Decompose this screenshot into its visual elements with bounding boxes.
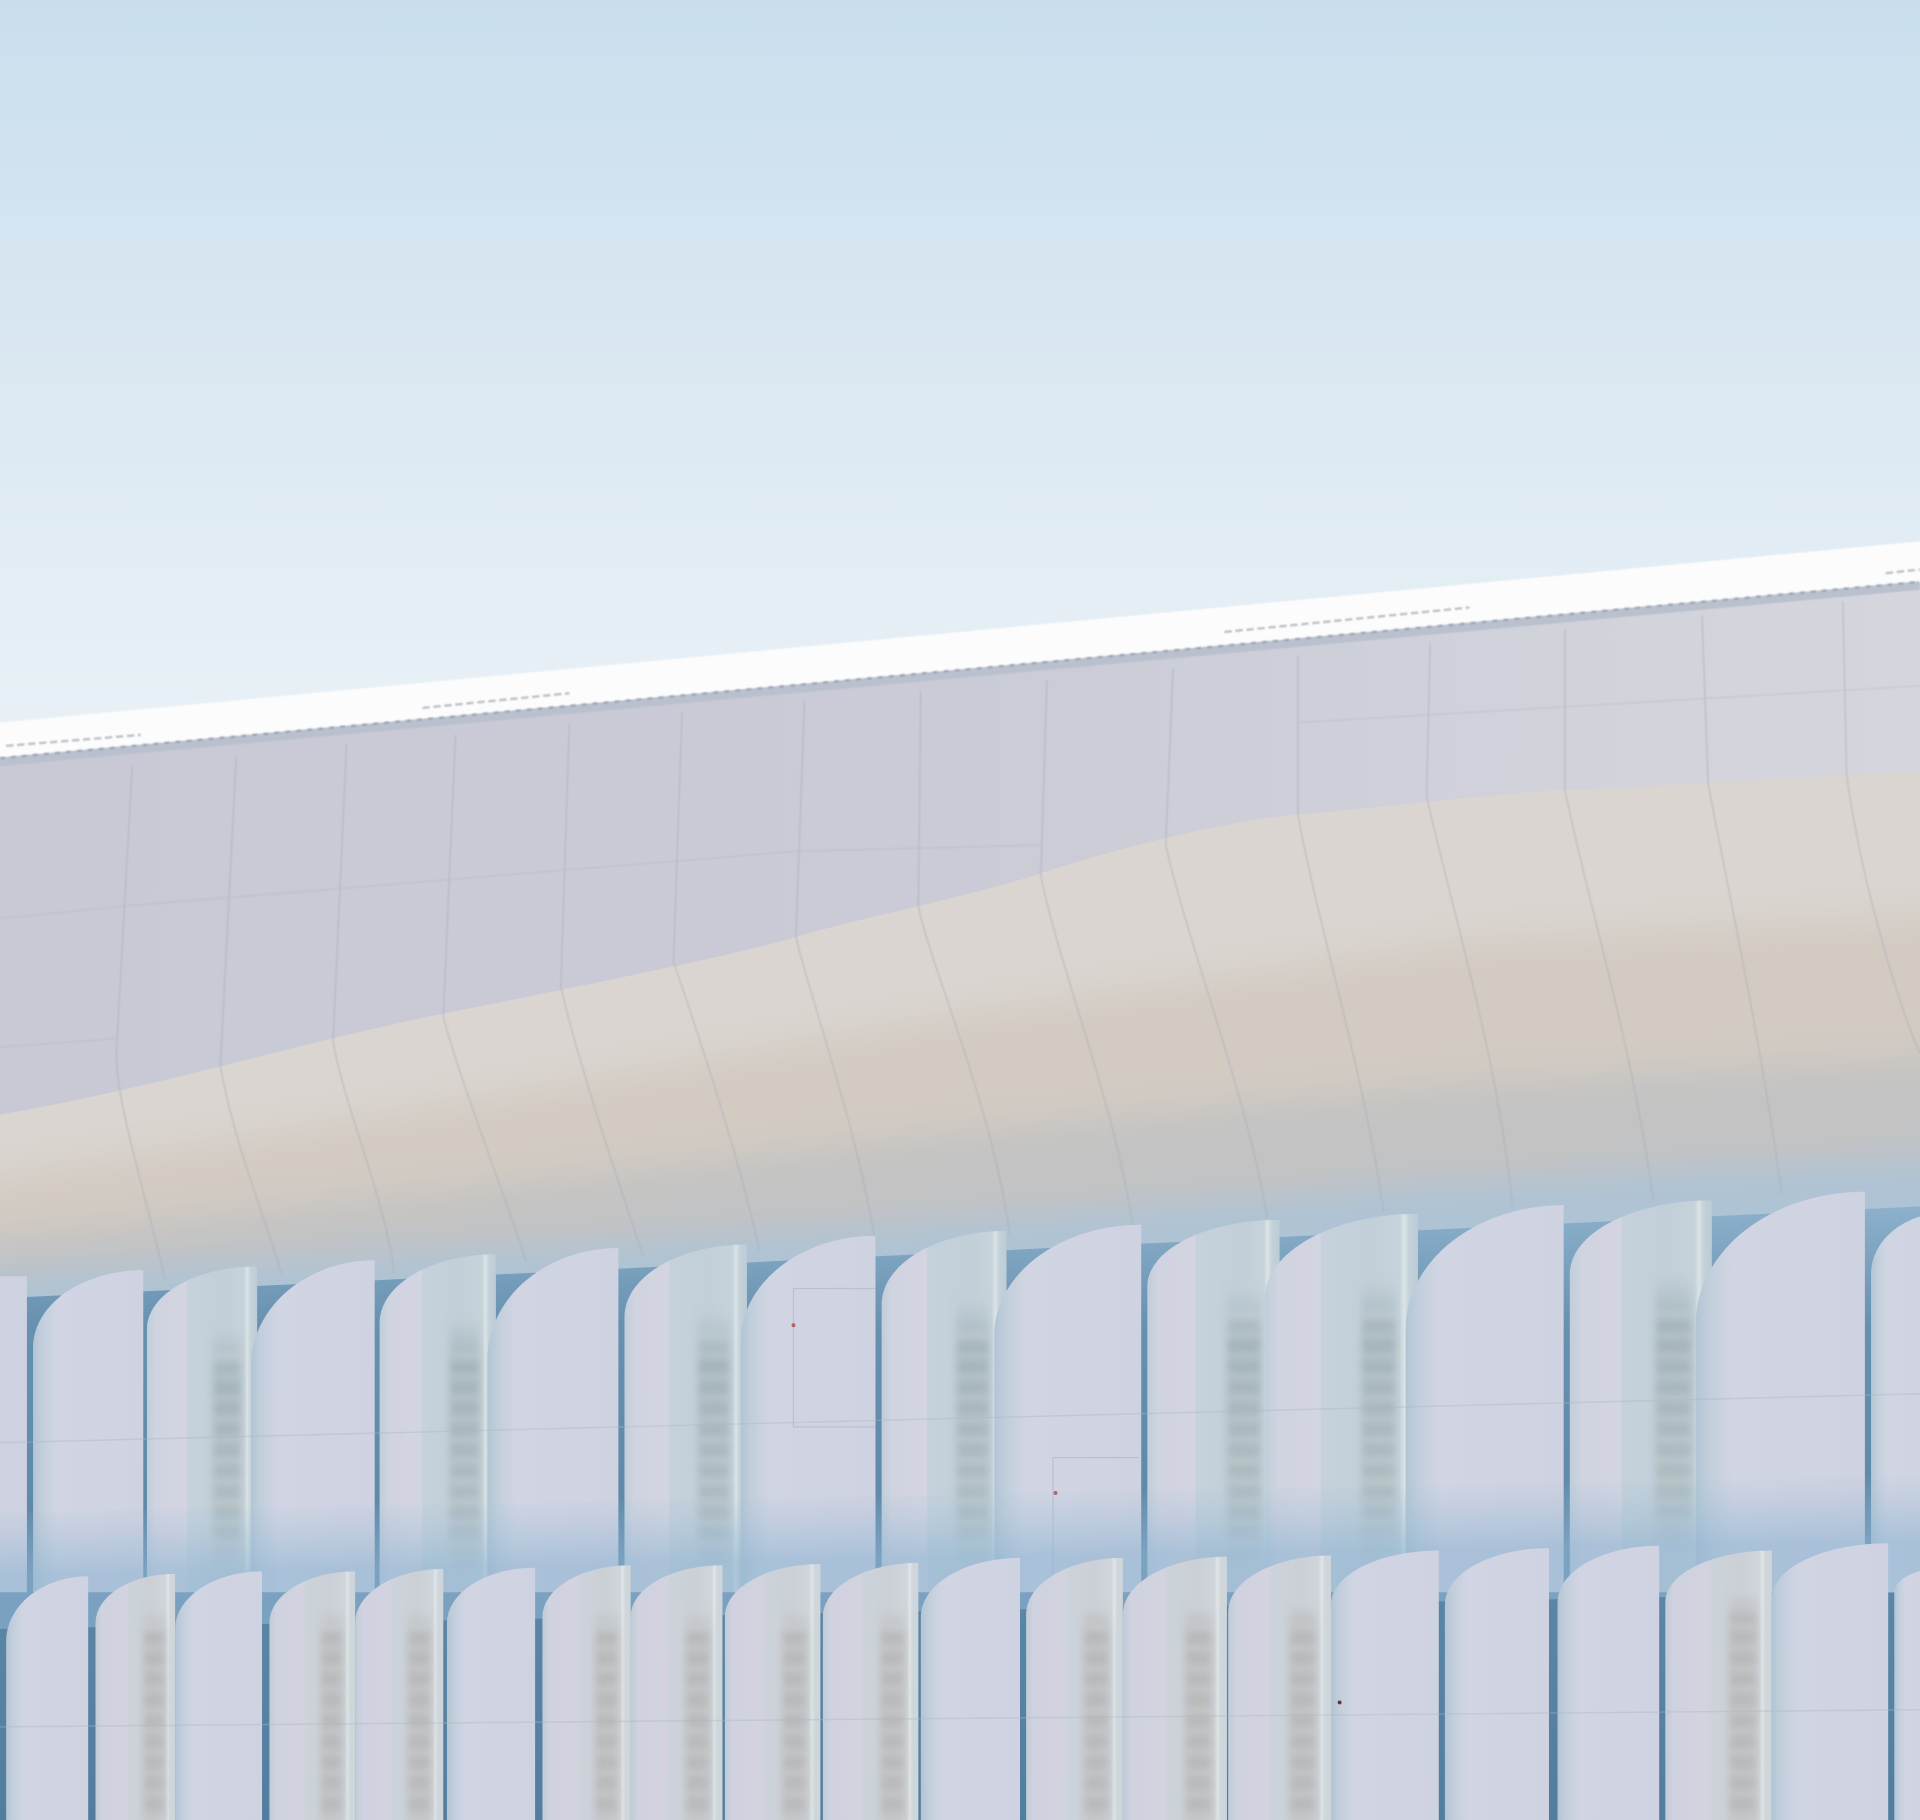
- roof: white top plane: [0, 541, 1920, 760]
- frosted fin: [147, 1266, 257, 1592]
- frosted fin: [1570, 1200, 1712, 1592]
- access doors and red markers: [792, 1288, 1139, 1580]
- frosted fin: [882, 1231, 1007, 1592]
- sky: [0, 0, 1920, 931]
- frosted fin: [631, 1565, 722, 1820]
- fin row 1 horizontal seam: [0, 1394, 1920, 1443]
- frosted fin: [269, 1571, 355, 1820]
- wall: upper grey panels: [0, 576, 1920, 1237]
- frosted fin: [624, 1244, 747, 1592]
- roof: eave band: [0, 582, 1920, 762]
- blue shadow above fin row 2: [0, 1476, 1920, 1629]
- frosted fin: [1147, 1220, 1280, 1592]
- frosted fin: [355, 1569, 443, 1820]
- roof vents: [6, 570, 1920, 746]
- frosted fin: [1265, 1214, 1418, 1592]
- frosted fin: [1228, 1555, 1331, 1820]
- fin row 2: [6, 1543, 1920, 1820]
- wall panel seams: [0, 601, 1920, 1280]
- fin row 1: [0, 1192, 1920, 1592]
- frosted fin: [380, 1254, 496, 1592]
- frosted fin: [1123, 1557, 1227, 1820]
- frosted fin: [1026, 1558, 1123, 1820]
- frosted fin: [96, 1574, 175, 1820]
- band behind the fins: [0, 1206, 1920, 1820]
- frosted fin: [725, 1564, 820, 1820]
- wall: tan curved lower section: [0, 772, 1920, 1297]
- frosted fin: [823, 1563, 918, 1820]
- fin row 2 horizontal seam and marker: [0, 1700, 1920, 1727]
- frosted fin: [542, 1565, 631, 1820]
- frosted fin: [1665, 1551, 1772, 1820]
